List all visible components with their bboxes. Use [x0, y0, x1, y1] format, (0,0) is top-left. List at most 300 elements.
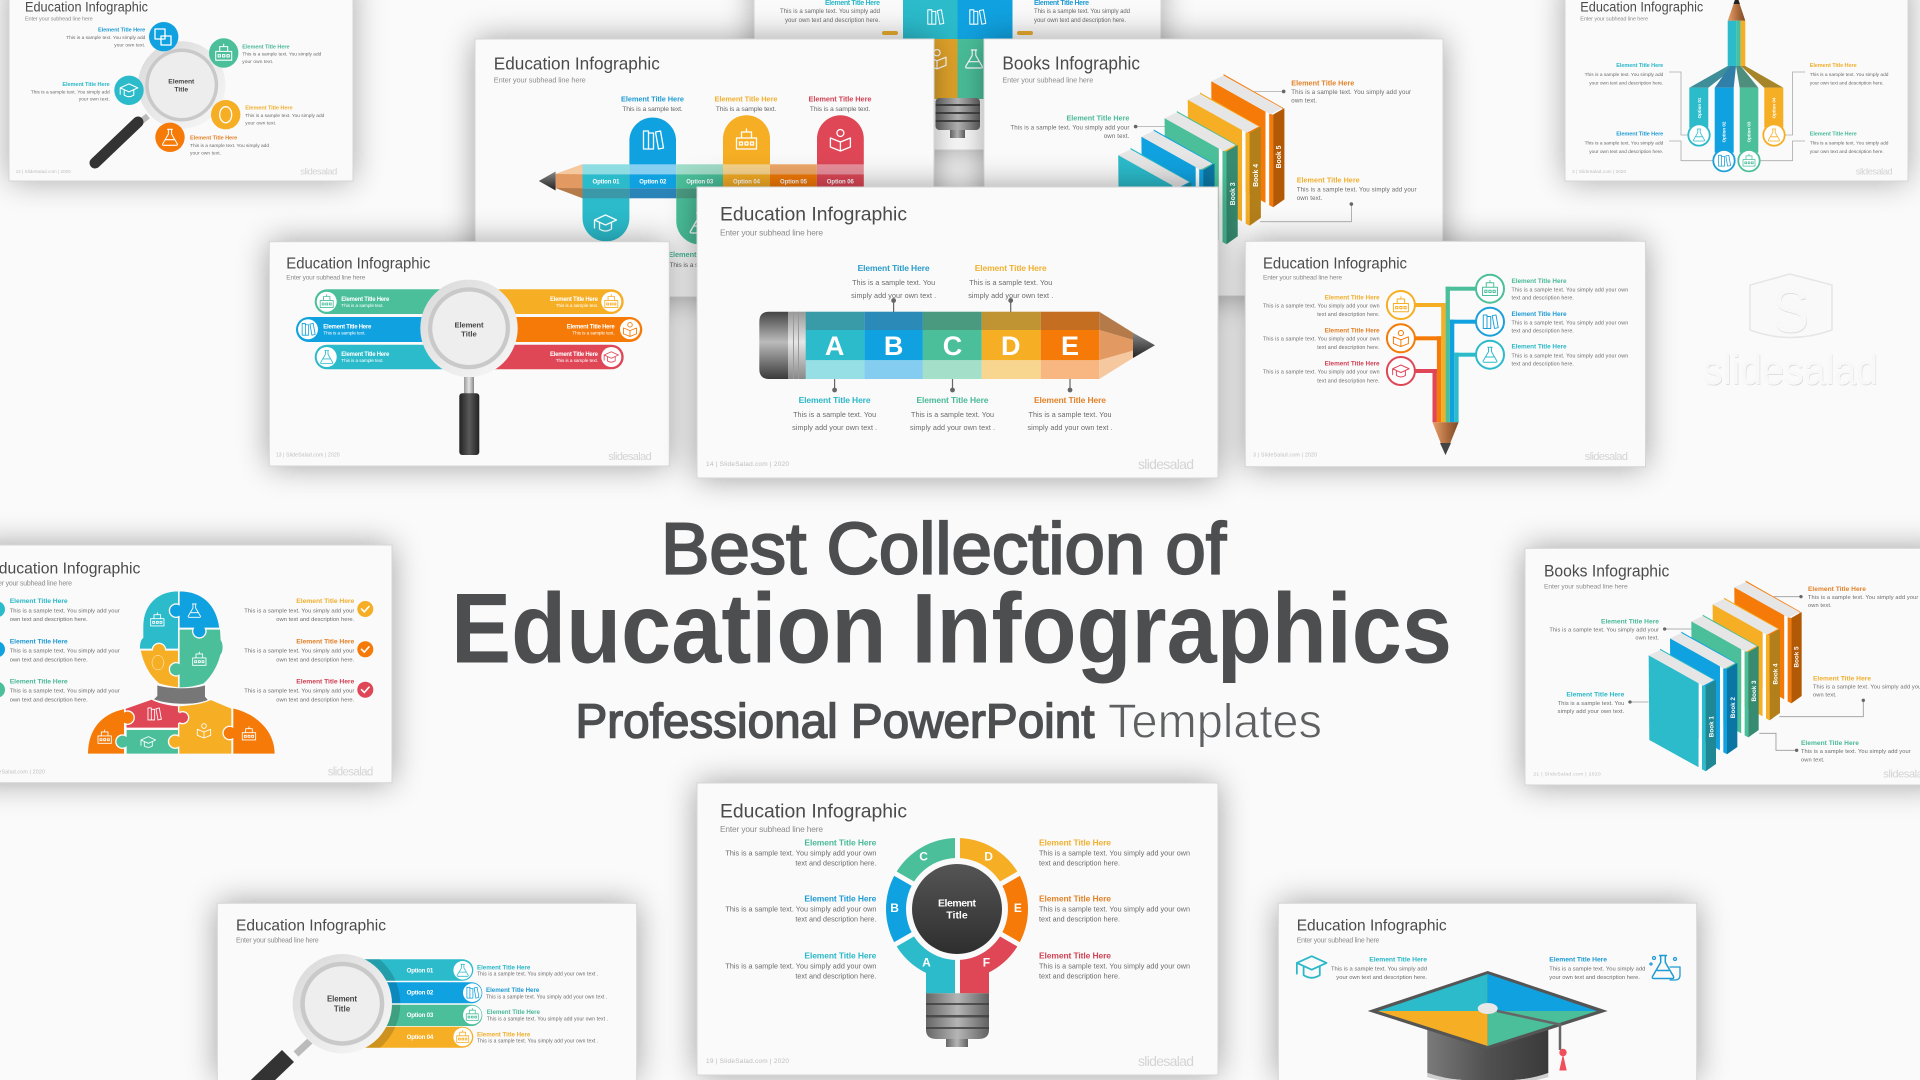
text: element B: simply add your own text . [851, 291, 936, 300]
title: Education Infographic [720, 204, 907, 226]
icon node: blue [149, 22, 178, 51]
icon: books [928, 10, 944, 24]
text: element C: simply add your own text . [910, 423, 995, 432]
text: right rows: This is a sample text. You simply add your own [1039, 849, 1190, 858]
text: lower right: This is a sample text. You simply add [1810, 140, 1889, 146]
magnifier: Element [327, 995, 357, 1004]
text: yellow tab [714, 94, 778, 113]
connector dots [1134, 90, 1353, 206]
icon: school [970, 10, 986, 24]
text: yellow element [245, 106, 325, 126]
text: right element [1549, 956, 1645, 981]
text: left rows: Element Title Here [10, 638, 68, 645]
text: orange book: own text. [1291, 98, 1317, 105]
footer: 12 | SlideSalad.com | 2020 [16, 169, 71, 174]
bulb: Title [946, 909, 968, 921]
tab: blue books [629, 117, 676, 165]
pencil: A [825, 331, 844, 361]
text: right rows: Element Title Here [1039, 838, 1111, 848]
pencil: C [943, 331, 962, 361]
text: teal book [1558, 692, 1625, 715]
text: upper left [1585, 63, 1664, 87]
book stack: Book 3 [1230, 182, 1237, 205]
text: right rows: Element Title Here [296, 678, 355, 685]
text: right rows: Element Title Here [1512, 278, 1567, 285]
title: Education Infographic [286, 255, 431, 272]
text: right rows: text and description here. [1039, 858, 1120, 867]
bulb: A [922, 955, 931, 969]
book stack: Book 2 [1207, 200, 1214, 223]
text: right rows: Element Title Here [1512, 311, 1567, 318]
footer: 3 | SlideSalad.com | 2020 [1253, 453, 1317, 459]
pencil: Option 05 [780, 179, 808, 185]
magnifier: Title [461, 330, 478, 339]
panel: bottom centre bulb slide [697, 783, 1218, 1075]
pencil: Option 01 [592, 179, 620, 185]
panel: option pencil slide [475, 39, 934, 297]
text: left rows: This is a sample text. You simply add your [10, 608, 120, 614]
text: lower right: Element Title Here [1810, 131, 1857, 137]
bar labels: This is a sample text. [572, 330, 615, 335]
text: teal element [31, 82, 110, 103]
bar labels: This is a sample text. [323, 330, 366, 335]
text: element E: simply add your own text . [1028, 423, 1112, 432]
text: teal book: simply add your own text. [1558, 709, 1625, 715]
text: right element: your own text and description here. [1034, 18, 1126, 24]
bulb: D [984, 850, 993, 864]
text: right rows: text and description here. [1039, 914, 1120, 923]
title: Books Infographic [1002, 54, 1140, 74]
pencil: Option 04 [1772, 97, 1776, 118]
text: yellow book: This is a sample text. You simply add your [1297, 186, 1417, 193]
text: orange book [1808, 586, 1918, 609]
subhead: Enter your subhead line here [286, 275, 366, 282]
option bars: Option 02 [407, 990, 434, 997]
pencil [759, 312, 1155, 379]
magnifier [251, 954, 392, 1080]
text: blue tab: This is a sample text. [622, 106, 683, 113]
option bars [364, 959, 482, 1048]
text: rows: This is a sample text. You simply add your own text . [477, 972, 598, 978]
logo: slidesalad [1138, 456, 1194, 472]
text: teal book: Element Title Here [1566, 692, 1625, 699]
subhead: Enter your subhead line here [1544, 584, 1628, 591]
text: yellow tab: This is a sample text. [716, 106, 776, 113]
subhead: Enter your subhead line here [25, 17, 93, 23]
book stack: Book 1 [1183, 221, 1190, 244]
book stack: Book 4 [1772, 663, 1779, 685]
subhead: Enter your subhead line here [720, 824, 823, 834]
text: right rows: This is a sample text. You simply add your own [1039, 905, 1190, 914]
bar labels: Element Title Here [323, 325, 372, 331]
text: green element: your own text. [242, 59, 273, 65]
magnifier: Element [168, 79, 195, 86]
text: lower right: your own text and description here. [1810, 149, 1884, 155]
pencil [1689, 0, 1783, 153]
title: Education Infographic [1297, 918, 1447, 935]
option bars: Option 01 [407, 967, 434, 974]
book stack: Book 3 [1751, 680, 1758, 702]
text: green lower book [1801, 740, 1911, 763]
text: teal element: your own text. [79, 97, 110, 103]
text: left rows: This is a sample text. You simply add your own [1263, 304, 1380, 310]
text: orange book [1291, 78, 1411, 105]
pencil: B [884, 331, 903, 361]
logo: embossed slidesalad mark: slidesalad [1703, 346, 1878, 393]
text: right element: This is a sample text. You simply add [1034, 9, 1130, 15]
book stack: Book 4 [1253, 164, 1260, 187]
text: lower left [1585, 131, 1664, 155]
text: green lower book: Element Title Here [1801, 740, 1859, 747]
text: right rows: This is a sample text. You simply add your [244, 648, 354, 654]
text: left rows: own text and description here. [10, 697, 88, 703]
bar labels: Element Title Here [341, 297, 390, 303]
footer: 13 | SlideSalad.com | 2020 [276, 453, 340, 459]
text: rows: Element Title Here [487, 1009, 541, 1016]
logo: slidesalad [300, 167, 337, 178]
pencil: Option 03 [1746, 121, 1752, 142]
pencil: D [1001, 331, 1020, 361]
text: left element: Element Title Here [825, 0, 880, 7]
text: left rows: Element Title Here [1325, 361, 1380, 368]
panel: magnifier slide left [269, 242, 669, 466]
text: element A: simply add your own text . [792, 423, 877, 432]
text: orange element: This is a sample text. You simply add [190, 143, 269, 149]
subhead: Enter your subhead line here [1580, 17, 1648, 23]
text: yellow book [1813, 676, 1920, 699]
logo: embossed slidesalad mark: S [1772, 277, 1809, 346]
icon node: yellow [211, 100, 240, 129]
title: Education Infographic [720, 800, 907, 822]
text: rows: Element Title Here [477, 964, 531, 971]
text: yellow book: own text. [1813, 693, 1837, 699]
text: right element: Element Title Here [1034, 0, 1089, 7]
text: lower left: Element Title Here [1616, 131, 1663, 137]
text: green upper book: Element Title Here [1601, 618, 1659, 625]
text: green lower book: own text. [1801, 757, 1825, 763]
text: left rows: own text and description here. [10, 617, 88, 623]
connector lines [1669, 72, 1805, 161]
text: left rows: This is a sample text. You simply add your own [1263, 370, 1380, 376]
text: green element [242, 44, 322, 65]
text: rows: Element Title Here [486, 987, 540, 994]
panel: person puzzle slide [0, 545, 392, 783]
subhead: Enter your subhead line here [1263, 275, 1342, 282]
icons: check marks [357, 601, 373, 698]
text: element D: Element Title Here [975, 263, 1047, 273]
magnifier: Title [174, 86, 188, 93]
text: left rows [725, 838, 877, 980]
icon: flask [966, 50, 982, 68]
text: upper right [1810, 63, 1889, 87]
book stack: Book 5 [1794, 646, 1801, 668]
panel: top right pencil fan slide [1565, 0, 1908, 181]
text: left rows: Element Title Here [804, 950, 877, 960]
text: green book [1010, 113, 1130, 140]
icon: reader [928, 50, 946, 69]
text: left rows: Element Title Here [10, 678, 68, 685]
text: yellow book: This is a sample text. You simply add your [1813, 685, 1920, 691]
icon node: orange [155, 123, 185, 152]
text: orange element: your own text. [190, 150, 221, 156]
text: right rows [1039, 838, 1190, 980]
subhead: Enter your subhead line here [1297, 938, 1380, 945]
text: green tab: This is a sample text. [669, 262, 730, 269]
text: green upper book: own text. [1635, 636, 1659, 642]
magnifier: Element [454, 320, 484, 329]
text: element C: This is a sample text. You [911, 410, 994, 419]
logo: slidesalad [1138, 1053, 1194, 1069]
text: element D [968, 263, 1053, 300]
text: orange element: Element Title Here [190, 136, 237, 142]
text: yellow element: your own text. [245, 120, 276, 126]
book stack [1649, 581, 1802, 771]
text: right rows: text and description here. [1512, 296, 1574, 302]
subhead: Enter your subhead line here [494, 75, 586, 84]
option bars: Option 04 [407, 1034, 434, 1041]
pencil: Option 02 [1722, 121, 1726, 142]
text: blue tab [621, 94, 684, 113]
panel: graduation cap slide [1278, 903, 1697, 1080]
text: left rows: text and description here. [1317, 312, 1380, 318]
panel: books slide top [984, 39, 1443, 297]
text: right rows: text and description here. [1039, 971, 1120, 980]
connectors [1098, 91, 1351, 222]
logo: slidesalad [608, 451, 652, 463]
text: right rows: Element Title Here [296, 638, 355, 645]
text: orange book: own text. [1808, 603, 1832, 609]
text: left rows: This is a sample text. You simply add your own [725, 905, 876, 914]
branching pencil [1415, 287, 1476, 455]
footer: 2 | SlideSalad.com | 2020 [1572, 169, 1626, 174]
text: upper right: This is a sample text. You simply add [1810, 72, 1889, 78]
text: left rows: Element Title Here [1325, 294, 1380, 301]
text: left rows: text and description here. [795, 858, 876, 867]
tab: yellow school [723, 115, 770, 165]
option bars [296, 289, 642, 369]
text: right rows: This is a sample text. You simply add your own [1512, 288, 1628, 294]
text: element E [1028, 395, 1112, 432]
heading line 2: Education Infographics [451, 572, 1452, 683]
pencil: Option 01 [1697, 97, 1702, 118]
text: element D: This is a sample text. You [969, 278, 1052, 287]
magnifier [420, 280, 518, 455]
panel: books slide right [1525, 548, 1920, 785]
icon node: teal [114, 76, 144, 105]
connectors [1630, 597, 1863, 750]
text: left rows: This is a sample text. You simply add your [10, 689, 120, 695]
bulb [886, 834, 1028, 1047]
bar labels: This is a sample text. [341, 303, 384, 308]
icon discs [298, 292, 640, 367]
text: left element: Element Title Here [1369, 956, 1427, 963]
pencil: Option 04 [733, 179, 761, 185]
text: element E: Element Title Here [1034, 395, 1106, 405]
text: red tab [808, 94, 872, 113]
text: green lower book: This is a sample text. You simply add your [1801, 749, 1911, 755]
text: element A: This is a sample text. You [793, 410, 876, 419]
text: left rows: own text and description here. [10, 657, 88, 663]
text: left rows: This is a sample text. You simply add your own [1263, 337, 1380, 343]
text: left rows: Element Title Here [10, 598, 68, 605]
connectors [833, 299, 1072, 392]
text: orange book: Element Title Here [1808, 586, 1866, 593]
title: Education Infographic [1263, 255, 1407, 272]
book stack: Book 2 [1730, 697, 1737, 718]
text: element D: simply add your own text . [968, 291, 1053, 300]
magnifier: Title [334, 1004, 351, 1013]
pencil: E [1061, 331, 1079, 361]
subheading bold part: Professional PowerPoint [576, 696, 1094, 749]
bulb: F [983, 955, 990, 969]
bar labels: This is a sample text. [341, 358, 384, 363]
text: right rows: This is a sample text. You simply add your own [1512, 321, 1628, 327]
text: orange book: Element Title Here [1291, 78, 1354, 87]
text: right rows: Element Title Here [1039, 950, 1111, 960]
panel: top left magnifier slide [9, 0, 353, 181]
panel: bottom left magnifier slide [217, 903, 637, 1080]
text: element B [851, 263, 936, 300]
text: right rows: Element Title Here [296, 598, 355, 605]
text: upper right: your own text and description here. [1810, 81, 1884, 87]
bar labels [323, 297, 615, 363]
text: right rows: This is a sample text. You simply add your [244, 689, 354, 695]
book stack [1118, 74, 1284, 281]
heading: main title block [451, 509, 1452, 749]
text: rows: This is a sample text. You simply add your own text . [486, 994, 607, 1000]
text: rows: This is a sample text. You simply add your own text . [487, 1016, 608, 1022]
text: blue element: This is a sample text. You simply add [66, 35, 146, 41]
icon nodes [1387, 275, 1504, 385]
text: upper right: Element Title Here [1810, 63, 1857, 69]
logo: embossed slidesalad mark: slidesalad [1704, 347, 1879, 394]
text: upper left: your own text and description here. [1589, 81, 1663, 87]
text: element E: This is a sample text. You [1028, 410, 1112, 419]
text: left rows: This is a sample text. You simply add your own [725, 962, 876, 971]
text: left element: This is a sample text. You simply add [1331, 966, 1427, 972]
pencil: Option 03 [686, 179, 714, 185]
text: rows [477, 964, 608, 1045]
text: right rows: This is a sample text. You simply add your [244, 608, 354, 614]
pencil: Option 06 [827, 179, 854, 185]
book stack: Book 5 [1276, 145, 1283, 168]
text: right rows: own text and description here. [276, 697, 355, 703]
bulb: C [919, 850, 928, 864]
title: Books Infographic [1544, 562, 1669, 581]
title: Education Infographic [236, 918, 386, 935]
graduation cap [1368, 971, 1608, 1080]
text: right rows: This is a sample text. You simply add your own [1039, 962, 1190, 971]
text: lower left: your own text and description here. [1589, 149, 1663, 155]
text: element C: Element Title Here [916, 395, 989, 405]
text: rows: Element Title Here [477, 1031, 531, 1038]
text: right element: Element Title Here [1549, 956, 1607, 963]
logo: embossed slidesalad mark [1703, 274, 1879, 394]
text: element B: This is a sample text. You [852, 278, 935, 287]
text: yellow book [1297, 176, 1417, 202]
text: lower right [1810, 131, 1889, 155]
text: right rows: Element Title Here [1512, 344, 1567, 351]
text: green tab [668, 250, 731, 269]
text: left rows: Element Title Here [1325, 327, 1380, 334]
text: left rows: text and description here. [795, 971, 876, 980]
text: element A [792, 395, 877, 432]
pencil: Option 02 [639, 179, 667, 185]
tab: green flask [676, 198, 723, 244]
text: left element: your own text and description here. [1336, 975, 1427, 981]
text: left element [780, 0, 880, 24]
text: green element: Element Title Here [242, 44, 290, 50]
text: upper left: This is a sample text. You simply add [1585, 72, 1664, 78]
heading line 1: Best Collection of [661, 509, 1227, 589]
text: green book: Element Title Here [1066, 113, 1129, 122]
bar labels: This is a sample text. [556, 358, 598, 363]
text: left rows [0, 598, 120, 703]
text: right rows: own text and description here. [276, 617, 355, 623]
text: green book: This is a sample text. You simply add your [1010, 124, 1129, 131]
tab: red reader [817, 115, 864, 165]
text: teal element: Element Title Here [62, 82, 110, 88]
text: element A: Element Title Here [799, 395, 871, 405]
text: blue element: Element Title Here [98, 28, 145, 34]
panel: top centre light bulb slide [754, 0, 1161, 150]
bulb dome and stem [882, 0, 1033, 138]
logo: slidesalad [328, 766, 373, 778]
text: left rows: text and description here. [795, 914, 876, 923]
logo: embossed slidesalad mark: S [1772, 278, 1810, 347]
text: teal element: This is a sample text. You simply add [31, 89, 110, 95]
subhead: Enter your subhead line here [1002, 76, 1093, 85]
tab: teal cap [582, 198, 629, 241]
magnifier [95, 41, 225, 163]
panel: centre pencil slide [697, 187, 1218, 478]
icon nodes [1688, 124, 1785, 171]
text: left rows: Element Title Here [804, 894, 877, 904]
text: rows: This is a sample text. You simply add your own text . [477, 1039, 598, 1045]
subheading light part: Templates [1108, 696, 1322, 749]
icon: graduation cap [1297, 956, 1327, 978]
text: left element: your own text and description here. [785, 18, 880, 24]
text: left rows: text and description here. [1317, 345, 1380, 351]
text: blue element [66, 28, 146, 48]
logo: slidesalad [1585, 451, 1628, 463]
text: right element [1034, 0, 1130, 24]
bulb: E [1014, 901, 1022, 915]
panel: branching pencil slide right [1245, 241, 1646, 467]
text: left rows: Element Title Here [804, 838, 877, 848]
bar labels: This is a sample text. [556, 303, 598, 308]
text: right rows: This is a sample text. You simply add your own [1512, 353, 1628, 359]
bulb: Element [938, 898, 976, 910]
icon node: green [209, 38, 238, 68]
text: red tab: Element Title Here [808, 94, 872, 103]
bar labels: Element Title Here [567, 325, 615, 331]
text: orange book: This is a sample text. You simply add your [1291, 89, 1411, 96]
text: left rows [1263, 294, 1380, 384]
bar labels: Element Title Here [550, 297, 599, 303]
text: green element: This is a sample text. You simply add [242, 52, 322, 58]
text: blue element: your own text. [114, 42, 145, 48]
text: right rows: text and description here. [1512, 361, 1574, 367]
text: right rows: text and description here. [1512, 329, 1574, 335]
text: left element [1331, 956, 1427, 981]
text: orange book: This is a sample text. You simply add your [1808, 595, 1918, 601]
icon discs [453, 961, 482, 1046]
puzzle person [87, 591, 275, 754]
subhead: Enter your subhead line here [720, 227, 823, 237]
title: Education Infographic [494, 53, 660, 73]
connector dots [1628, 595, 1865, 752]
